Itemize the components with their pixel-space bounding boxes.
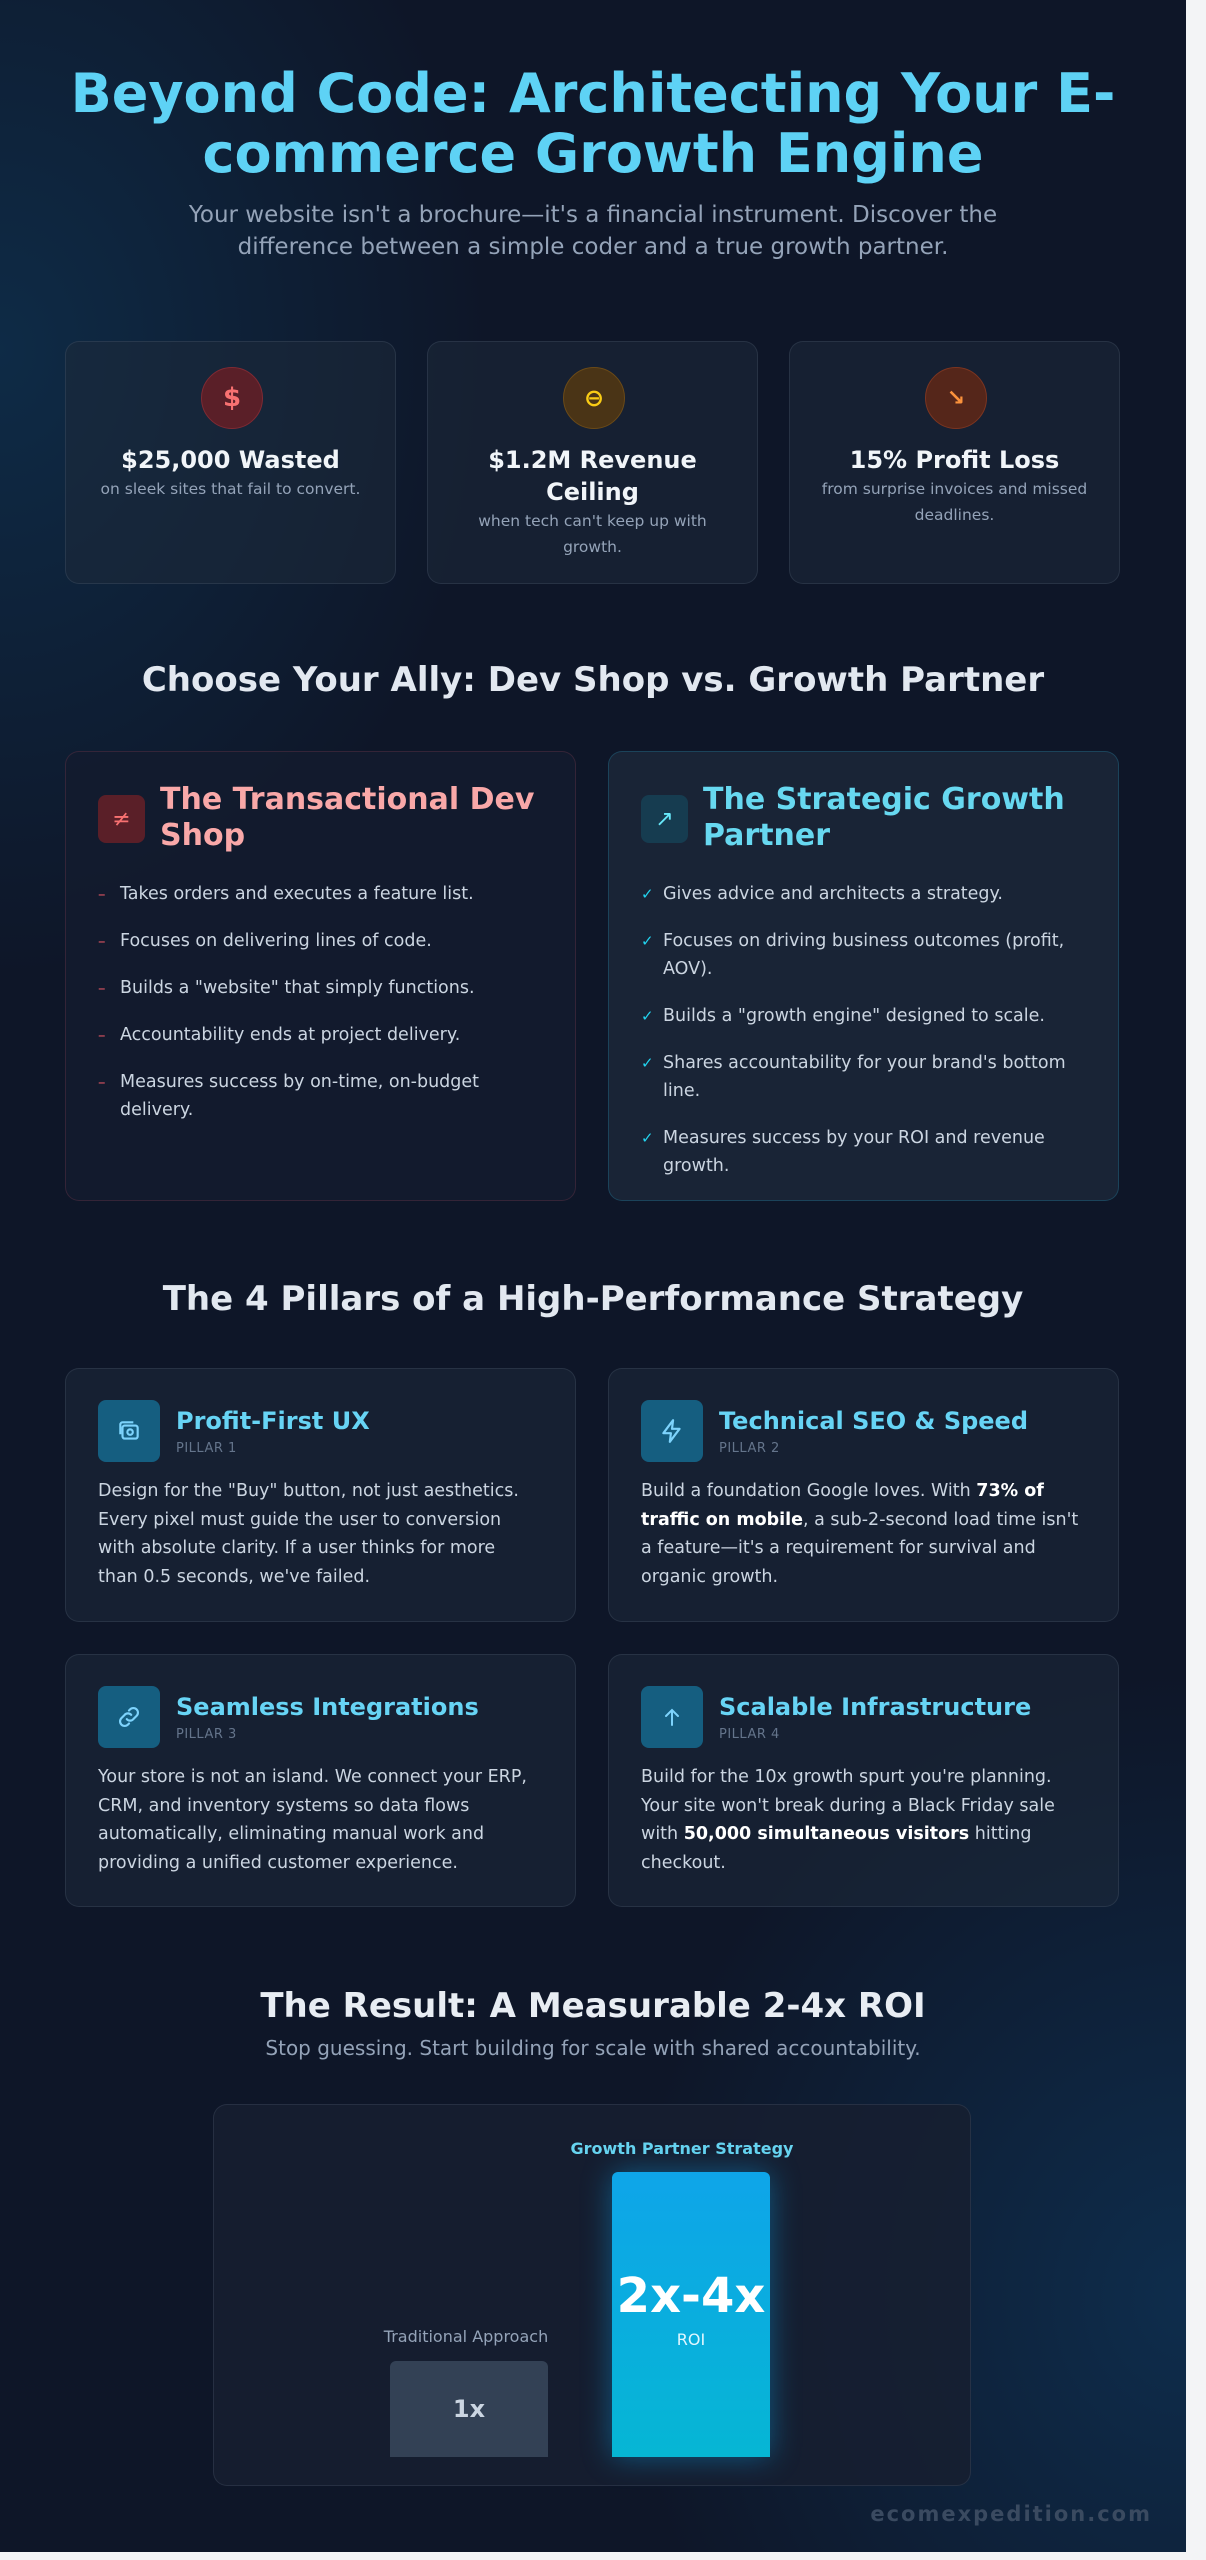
list: dev shop traits: Focuses on delivering lines of code.: [120, 931, 432, 951]
icon: minus circle: [563, 367, 625, 429]
heading: choose your ally: Choose Your Ally: Dev Shop vs. Growth Partner: [142, 660, 1044, 700]
title: Beyond Code: Architecting Your E-: [71, 62, 1115, 125]
stat text: deadlines.: [915, 506, 994, 524]
list: dev shop traits: –: [98, 1026, 106, 1044]
bar: growth partner: 2x-4x: [617, 2268, 765, 2324]
list: partner traits: Focuses on driving business outcomes (profit, AOV).: [663, 931, 1064, 979]
pillar title: Profit-First UX: [176, 1407, 370, 1435]
pillar title: Scalable Infrastructure: [719, 1693, 1031, 1721]
stat text: $1.2M Revenue: [488, 446, 697, 474]
stat card: ceiling: [427, 341, 758, 584]
icon: link: [98, 1686, 160, 1748]
panel: growth partner: [608, 751, 1119, 1201]
list: partner traits: ✓: [641, 1129, 654, 1147]
title: [71, 62, 1115, 185]
icon: trend down: ↘: [947, 386, 965, 410]
stat text: [101, 446, 360, 498]
icon: not equal: ≠: [112, 806, 131, 832]
list: partner traits: Gives advice and architects a strategy.: [663, 884, 1003, 904]
stat text: on sleek sites that fail to convert.: [101, 480, 360, 498]
pillar 1: [65, 1368, 576, 1622]
list: dev shop traits: [98, 884, 479, 1120]
stat text: from surprise invoices and missed: [822, 480, 1087, 498]
icon: trend up: [641, 795, 688, 843]
icon: money: $: [223, 383, 241, 413]
pillar 2: PILLAR 2: [719, 1441, 780, 1456]
icon: trend up: ↗: [655, 806, 674, 832]
panel title: The Strategic Growth: [703, 782, 1065, 817]
stat card: profit loss: [789, 341, 1120, 584]
list: partner traits: ✓: [641, 1007, 654, 1025]
panel title: Partner: [703, 818, 830, 853]
stat text: $25,000 Wasted: [121, 446, 340, 474]
bar: growth partner: Growth Partner Strategy: [570, 2139, 793, 2158]
panel title: Shop: [160, 818, 245, 853]
panel title: The Transactional Dev: [160, 782, 534, 817]
pillar 1: PILLAR 1: [176, 1441, 237, 1456]
list: partner traits: [641, 884, 1066, 1176]
bar: traditional: [384, 2327, 548, 2457]
pillar title: Technical SEO & Speed: [719, 1407, 1028, 1435]
list: partner traits: Shares accountability for your brand's bottom line.: [663, 1053, 1066, 1101]
heading: result: The Result: A Measurable 2-4x ROI: [260, 1986, 926, 2026]
heading: pillars: The 4 Pillars of a High-Performance Strategy: [163, 1279, 1023, 1319]
stat text: Ceiling: [546, 478, 639, 506]
bar chart: [213, 2104, 971, 2486]
bar: growth partner: ROI: [677, 2330, 705, 2349]
subtitle: Your website isn't a brochure—it's a financial instrument. Discover the: [189, 202, 997, 228]
list: partner traits: ✓: [641, 932, 654, 950]
list: dev shop traits: –: [98, 979, 106, 997]
list: dev shop traits: Builds a "website" that simply functions.: [120, 978, 475, 998]
result subtitle: Stop guessing. Start building for scale with shared accountability.: [265, 2036, 921, 2060]
pillar body: Design for the "Buy" button, not just aesthetics. Every pixel must guide the user to conversion with absolute clarity. If a user thinks for more than 0.5 seconds, we've failed.: [98, 1481, 519, 1586]
list: dev shop traits: Measures success by on-time, on-budget delivery.: [120, 1072, 479, 1120]
panel title: [703, 782, 1065, 853]
pillar 2: [608, 1368, 1119, 1622]
bar: traditional: Traditional Approach: [384, 2327, 548, 2346]
stat card: wasted: [65, 341, 396, 584]
icon: cash: [98, 1400, 160, 1462]
list: partner traits: Measures success by your ROI and revenue growth.: [663, 1128, 1045, 1176]
icon: bolt: [641, 1400, 703, 1462]
bar: growth partner: [570, 2139, 794, 2474]
title: commerce Growth Engine: [203, 122, 983, 185]
pillar body: Build for the 10x growth spurt you're planning. Your site won't break during a Black Friday sale with 50,000 simultaneous visitors hitting checkout.: [641, 1767, 1055, 1872]
list: dev shop traits: Takes orders and executes a feature list.: [120, 884, 474, 904]
stat text: [822, 446, 1087, 524]
icon: arrow up: [641, 1686, 703, 1748]
pillar body: Build a foundation Google loves. With 73% of traffic on mobile, a sub-2-second load time isn't a feature—it's a requirement for survival and organic growth.: [641, 1481, 1078, 1586]
stat text: 15% Profit Loss: [850, 446, 1059, 474]
footer: brand: ecomexpedition.com: [870, 2502, 1152, 2526]
pillar title: Seamless Integrations: [176, 1693, 479, 1721]
pillar 4: [608, 1654, 1119, 1907]
stat text: when tech can't keep up with: [478, 512, 707, 530]
subtitle: [188, 202, 997, 260]
list: dev shop traits: –: [98, 1073, 106, 1091]
stat text: [478, 446, 707, 556]
list: dev shop traits: Accountability ends at project delivery.: [120, 1025, 460, 1045]
pillar 4: PILLAR 4: [719, 1727, 780, 1742]
list: partner traits: ✓: [641, 885, 654, 903]
list: partner traits: Builds a "growth engine" designed to scale.: [663, 1006, 1045, 1026]
pillar 3: [65, 1654, 576, 1907]
stat text: growth.: [563, 538, 622, 556]
pillar 3: PILLAR 3: [176, 1727, 237, 1742]
subtitle: difference between a simple coder and a true growth partner.: [238, 234, 948, 260]
icon: trend down: [925, 367, 987, 429]
list: dev shop traits: –: [98, 885, 106, 903]
list: partner traits: ✓: [641, 1054, 654, 1072]
panel title: [160, 782, 534, 853]
list: dev shop traits: –: [98, 932, 106, 950]
bar: traditional: 1x: [453, 2395, 485, 2423]
icon: minus circle: ⊖: [584, 384, 604, 412]
panel: dev shop: [65, 751, 576, 1201]
pillar body: Your store is not an island. We connect your ERP, CRM, and inventory systems so data flows automatically, eliminating manual work and providing a unified customer experience.: [98, 1767, 527, 1872]
icon: money: [201, 367, 263, 429]
icon: not equal: [98, 795, 145, 843]
